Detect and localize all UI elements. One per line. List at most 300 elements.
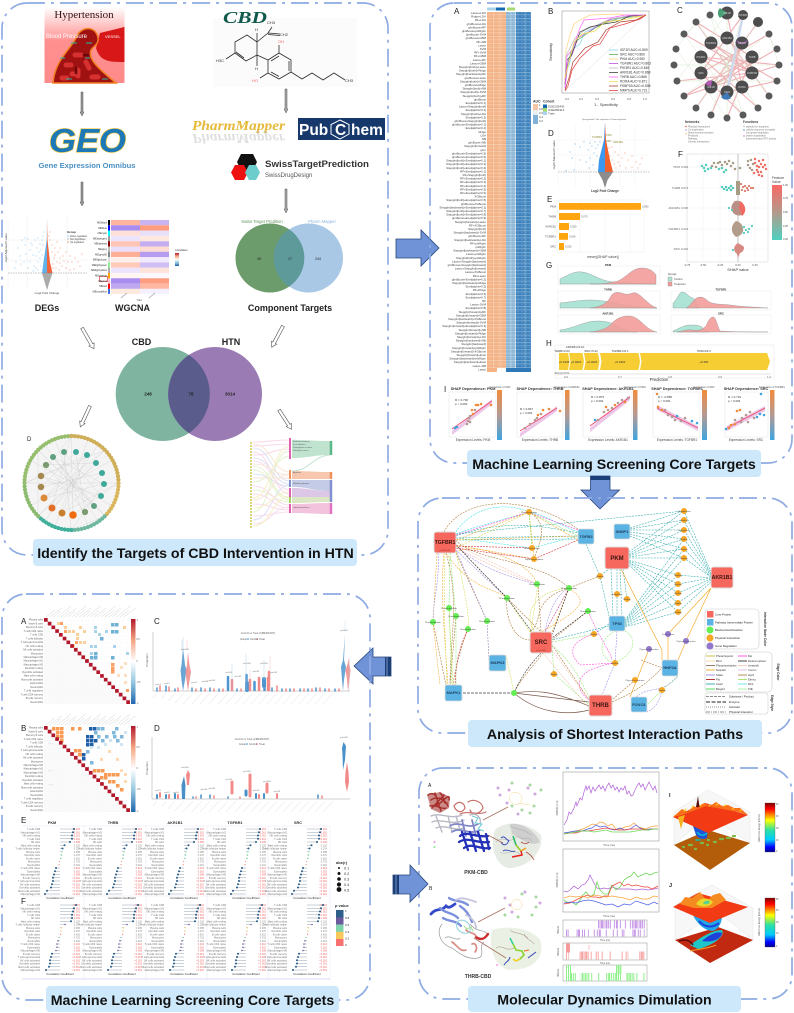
chart A: AUC model heatmap: Stepglm[backward] [461, 342, 486, 346]
chart G: density plots: THRB [604, 288, 612, 292]
chart A: AUC model heatmap: RF+Enet[alpha=0.3] [460, 180, 486, 184]
logo: SwissTargetPrediction: SwissDrugDesign [265, 173, 312, 179]
violin chart C: Control [250, 638, 259, 641]
arrow: GEO to DEGs [80, 182, 84, 206]
logo: GEO [38, 122, 136, 170]
chart A: AUC model heatmap: RF+Ridge [473, 288, 486, 292]
chart C: gene network: RORA [738, 85, 746, 89]
network: reaction nodes: Binding [658, 690, 666, 692]
arrow: component targets to big venn [269, 325, 286, 349]
violin chart C: p<0.01 [226, 671, 233, 674]
legend: edge color: Phosphopoint [716, 654, 733, 658]
chart: WGCNA heatmap: MEgrey60 [95, 252, 108, 256]
network: reaction nodes: Phosphorylation [425, 621, 442, 624]
chart: DEGs volcano: Not Significant [70, 238, 86, 241]
chart B: ROC curves [548, 7, 651, 107]
chart C: gene network: IGF1R [707, 85, 715, 89]
network: reaction nodes: Binding [596, 576, 604, 578]
chart G: density plots: PKM [605, 263, 612, 267]
legend: abs(r): 0.1 [344, 866, 349, 870]
chart C: gene network: MMP9 [738, 41, 746, 45]
chart F: SHAP beeswarm: SHAP value [727, 267, 750, 272]
chart: hydrogen bond barcode purple: HBonds [557, 925, 560, 934]
chart E: mean SHAP bars: E [547, 195, 552, 204]
chart A: AUC model heatmap: Enet[alpha=0.7] [466, 295, 486, 299]
panel: identify targets [2, 3, 388, 566]
heading pill: molecular dynamics: Molecular Dynamics Dimulation [497, 992, 712, 1008]
violin chart D: p=0.2 [164, 792, 170, 794]
network: core proteins [434, 532, 733, 716]
chart A: AUC model heatmap: SVM [480, 47, 487, 51]
chart: DEGs volcano: Log2 Fold Change [35, 291, 60, 295]
network: reaction nodes: Phosphorylation [499, 597, 516, 600]
network: core proteins: THRB [592, 703, 609, 709]
network: reaction nodes: Phosphorylation [524, 547, 541, 550]
legend: edge style: Enzyme [729, 700, 740, 704]
network: reaction nodes: Binding [674, 612, 682, 614]
chart B: ROC curves: 0.6 [611, 97, 615, 101]
panel: molecular dynamics [419, 768, 792, 1012]
chart A: AUC model heatmap: Stepglm[both]+Enet[alpha=0.2] [446, 162, 486, 166]
network: reaction nodes: Binding [674, 603, 682, 605]
chart A: AUC model heatmap: Lasso+RF [473, 58, 486, 62]
chart F: SHAP beeswarm: 0.00 [735, 263, 741, 267]
chart: DEGs volcano: Down-regulated [70, 235, 88, 238]
legend: edge color: Pdb [748, 687, 753, 691]
logo: PubChem [298, 118, 385, 140]
violin chart C: Control vs Treat (CIBERSORT) [241, 632, 275, 635]
heatmap B: B [21, 724, 26, 733]
chart C: gene network: Physical Interactions [688, 126, 711, 128]
lollipop charts E: AKR1B1 [167, 821, 183, 825]
chart F: SHAP beeswarm: THRB [672, 186, 680, 190]
venn: component targets: Pharm Mapper [308, 219, 336, 224]
chart C: gene network: transmembrane RTK activity [746, 138, 777, 140]
chart E: mean SHAP bars: 0.024 [569, 234, 576, 238]
molecule: cannabidiol structure [213, 18, 357, 87]
chart C: gene network: PIK3R1 [697, 55, 706, 59]
chart G: density plots: Group [668, 272, 677, 276]
network: reaction nodes: Binding [623, 599, 631, 601]
network: reaction nodes: Binding [674, 593, 682, 595]
chart A: AUC model heatmap: Enet[alpha=0.2] [466, 108, 486, 112]
chart I: free energy surface: 45 [776, 816, 779, 818]
violin chart C: p=0.4 [191, 682, 197, 684]
chart G: density plots [546, 261, 771, 334]
heading pill: shortest paths [468, 720, 762, 747]
chart E: mean SHAP bars: 0.030 [570, 224, 577, 228]
chart A: AUC model heatmap: Stepglm[both]+SVM [460, 90, 487, 94]
chart A: AUC model heatmap: glmBoost+Stepglm[backward] [448, 263, 486, 267]
chart J: free energy surface: 45 [776, 910, 779, 912]
heatmap B: 0 [136, 768, 138, 770]
arrow: interaction paths to immune [354, 648, 391, 684]
chart A: AUC model heatmap: Lasso+plsRglm [466, 252, 487, 256]
violin chart D: p<0.001 [243, 770, 252, 773]
chart F: SHAP beeswarm: -0.25 [717, 263, 724, 267]
chart A: AUC model heatmap: Lasso [478, 43, 486, 47]
chart I: SHAP dependence scatter plots: p < 0.001 [520, 411, 533, 415]
chart C: gene network: peptidyl-tyr. autophos. [746, 126, 770, 128]
heading pill: shortest paths: Analysis of Shortest Interaction Paths [487, 727, 743, 743]
chart I: SHAP dependence scatter plots: Expression of SRC [489, 386, 511, 389]
network: reaction nodes: Binding [590, 634, 598, 636]
chart F: SHAP beeswarm: SRC [674, 247, 681, 251]
chart C: gene network: IGF1R [723, 11, 731, 15]
heatmap B: -0.5 [136, 789, 141, 791]
chart A: AUC model heatmap: Lasso+LDA [471, 11, 486, 15]
chart I: SHAP dependence scatter plots: I [444, 385, 446, 394]
heatmap B: * ** *** [48, 785, 53, 787]
legend: edge color: Intact [716, 682, 723, 686]
chart H: SHAP waterfall: H [546, 339, 552, 348]
chart I: SHAP dependence scatter plots: p < 0.001 [658, 399, 671, 403]
venn: component targets: 17 [288, 257, 292, 261]
chart I: SHAP dependence scatter plots: Expression of AKR1B1 [554, 386, 580, 389]
chart J: free energy surface: 0 [776, 946, 778, 948]
chart E: mean SHAP bars: THRB [548, 214, 556, 218]
chart A: AUC model heatmap: Stepglm[both]+LDA [461, 112, 486, 116]
chart: RMSD lower: Time (ns) [603, 914, 615, 918]
chart A: AUC model heatmap: RF [482, 299, 486, 303]
chart A: AUC model heatmap: glmBoost+Enet[alpha=0.1] [452, 123, 486, 127]
label: WGCNA: WGCNA [115, 303, 150, 313]
network: reaction nodes: Binding [674, 584, 682, 586]
chart A: AUC model heatmap: RF+Enet[alpha=0.4] [460, 184, 486, 188]
chart A: AUC model heatmap: 0.8 [539, 107, 543, 111]
network: reaction nodes: Phosphorylation [441, 607, 458, 610]
heatmap B: 1 [136, 727, 138, 729]
chart I: SHAP dependence scatter plots: Expression of PKM [624, 386, 646, 389]
chart I: SHAP dependence scatter plots: p < 0.001 [591, 399, 604, 403]
chart A: AUC model heatmap: Stepglm[both] [468, 227, 486, 231]
chart A: AUC model heatmap: Stepglm[both]+Lasso [459, 65, 486, 69]
chart A: AUC model heatmap: Stepglm[backward]+XGBoost [448, 317, 486, 321]
chart A: AUC model heatmap: Stepglm[both]+Ridge [459, 69, 486, 73]
network: reaction nodes: Acetylation [612, 593, 623, 596]
chart A: AUC model heatmap: Lasso+NB [473, 364, 486, 368]
chart F: SHAP beeswarm: 0.036 [681, 206, 688, 210]
chart G: density plots: Treatment [674, 282, 686, 286]
label: DEGs: DEGs [35, 303, 59, 313]
chart B: ROC curves: SRC AUC=0.860 [620, 53, 645, 57]
chart A: AUC model heatmap: Stepglm[forward]+Enet[alpha=0.3] [442, 324, 486, 328]
chart A: AUC model heatmap: Stepglm[forward]+GBM [456, 313, 487, 317]
chart H: SHAP waterfall: AKR1B1=5.10 [566, 345, 585, 349]
logo: GEO: Gene Expression Omnibus [38, 161, 136, 170]
venn: component targets [236, 219, 343, 292]
arrow: venn to sankey [276, 408, 294, 431]
chart G: density plots: TGFBR1 [715, 288, 727, 292]
chart A: AUC model heatmap: Stepglm[both]+plsRglm [456, 256, 487, 260]
chart A: AUC model heatmap: Stepglm[forward]+XGBoost [451, 349, 486, 353]
arrow: venn to PPI network [78, 405, 93, 428]
chart E: mean SHAP bars: PKM [550, 204, 557, 208]
chart A: AUC model heatmap: Stepglm[forward]+Ridge [455, 331, 486, 335]
venn: CBD and HTN overlap: HTN [222, 337, 240, 347]
figure A: PKM-CBD complex: PKM-CBD [464, 870, 488, 876]
chart D: volcano [548, 118, 650, 193]
chart B: ROC curves: 0.2 [579, 97, 583, 101]
violin chart D [145, 724, 350, 812]
chart F: SHAP beeswarm: 0.25 [752, 263, 758, 267]
chart: WGCNA heatmap: MEcyan [98, 231, 108, 235]
chart F: SHAP beeswarm: 0.073 [681, 186, 688, 190]
heatmap A: -0.5 [136, 682, 141, 684]
chart A: AUC model heatmap: Stepglm[backward]+LDA [454, 238, 486, 242]
chart A: AUC model heatmap: Stepglm[backward]+NB [456, 339, 486, 343]
network: core proteins: p.K17/p.T3 [440, 550, 451, 552]
chart A: AUC model heatmap: glmBoost+Enet[alpha=0.2] [452, 277, 486, 281]
chart I: free energy surface: 30 [776, 828, 779, 830]
chart F: SHAP beeswarm: -0.50 [700, 263, 707, 267]
chart D: volcano: -log10 Adjusted P-value [552, 140, 556, 170]
chart G: density plots: Control [674, 277, 683, 281]
venn: CBD and HTN overlap: 3014 [225, 392, 236, 396]
chart B: ROC curves: MMP9 AUC=0.721 [620, 89, 648, 93]
legend: interaction node color: Pathway Intermediate Protein [715, 620, 753, 624]
network: reaction nodes: Phosphorylation [521, 511, 538, 514]
chart H: SHAP waterfall: +0.0224 [587, 360, 598, 364]
chart H: SHAP waterfall: +0.0224 [571, 360, 582, 364]
network: reaction nodes: Binding [680, 520, 688, 522]
chart C: gene network: SRC [698, 71, 704, 75]
chart: RMSD lower [555, 849, 659, 918]
chart E: mean SHAP bars: 0.073 [581, 214, 588, 218]
chart B: ROC curves: PKM AUC=0.952 [620, 57, 645, 61]
network: reaction nodes: Transcription [662, 633, 675, 636]
chart A: AUC model heatmap: RF+Enet[alpha=0.5] [460, 187, 486, 191]
network: reaction nodes: Phosphorylation [479, 620, 496, 623]
lollipop charts E: PKM [48, 821, 56, 825]
chart: WGCNA heatmap: MElightyellow [91, 268, 107, 272]
venn: CBD and HTN overlap: CBD [132, 337, 152, 347]
legend: interaction node color: Physical Interaction [715, 636, 740, 640]
network: reaction nodes [425, 510, 696, 693]
chart B: ROC curves: AKR1B1 AUC=0.868 [620, 71, 651, 75]
chart A: AUC model heatmap: AUC [533, 100, 541, 104]
logo: PubChem: C [335, 122, 346, 139]
chart C: gene network: protein localization [746, 134, 766, 138]
legend: abs(r): 0.4 [344, 883, 349, 887]
chart I: SHAP dependence scatter plots: R = 0.790 [455, 398, 468, 402]
chart: hydrogen bond barcode green [557, 965, 647, 981]
network: pathway intermediate proteins: HNF4A [663, 665, 677, 670]
network: reaction nodes: Physical interaction [626, 679, 645, 682]
chart E: mean SHAP bars [545, 195, 649, 259]
chart A: AUC model heatmap: glmBoost+RF [468, 234, 486, 238]
violin chart C [145, 617, 350, 704]
chart: sankey: Focal adhesion [293, 444, 305, 446]
network: reaction nodes: Binding [680, 539, 688, 541]
network: pathway intermediate proteins [445, 524, 678, 712]
chart C: gene network: cell growth regulation [746, 132, 769, 134]
chart A: AUC model heatmap: Enet[alpha=0.4] [466, 126, 486, 130]
legend: interaction node color: Core Protein [715, 612, 732, 616]
chart B: ROC curves: FKBP1B AUC=0.808 [620, 84, 651, 88]
violin chart C: Proportion [145, 653, 149, 666]
chart C: gene network: THRB [748, 55, 756, 59]
chart F: SHAP beeswarm: 0.020 [681, 247, 688, 251]
chart: WGCNA heatmap: Trait [136, 298, 142, 302]
legend: edge style [705, 693, 774, 714]
venn: component targets: Swiss Target Predition [241, 219, 283, 224]
chart F: SHAP beeswarm: F [678, 150, 683, 159]
violin chart D: p=0.02 [253, 790, 260, 792]
chart A: AUC model heatmap: plsRglm [476, 245, 487, 249]
network: reaction nodes: Physical interaction [640, 648, 659, 651]
chart: PPI network D: D [27, 437, 32, 443]
chart: WGCNA heatmap [91, 220, 188, 302]
chart C: gene network: Genetic Interactions [688, 140, 710, 144]
chart: WGCNA heatmap: MEdarkred [94, 242, 108, 246]
chart I: SHAP dependence scatter plots: R = 0.847 [520, 407, 533, 411]
network: reaction nodes: Binding [674, 575, 682, 577]
figure A: PKM-CBD complex: A [428, 783, 432, 789]
legend: edge color: Spike [716, 673, 723, 677]
heading pill: machine learning screening 2: Machine Learning Screening Core Targets [51, 993, 334, 1009]
chart A: AUC model heatmap: Stepglm[forward]+RF [459, 310, 486, 314]
legend: p value: p value [335, 903, 350, 908]
figure B: THRB-CBD complex [429, 886, 542, 980]
chart A: AUC model heatmap: Stepglm[both]+GBM [460, 79, 487, 83]
chart A: AUC model heatmap: A [454, 7, 460, 16]
chart I: SHAP dependence scatter plots: SHAP Dependence: PKM [451, 387, 495, 391]
chart H: SHAP waterfall: +0.281 [700, 360, 709, 364]
network: pathway intermediate proteins: TP53 [612, 621, 623, 626]
molecule: cannabidiol structure: H3C [216, 58, 224, 63]
chart A: AUC model heatmap: RF+Lasso [473, 274, 486, 278]
heatmap B: ** * ** * [48, 771, 54, 773]
chart I: SHAP dependence scatter plots: Expression Levels: TGFBR1 [657, 438, 697, 442]
chart H: SHAP waterfall: 1.0 [767, 375, 771, 379]
network: reaction nodes: Binding [680, 558, 688, 560]
chart A: AUC model heatmap: Stepglm[both]+RF [463, 94, 486, 98]
violin chart C: p<0.001 [181, 648, 190, 651]
lig-plot B top [505, 892, 540, 917]
chart C: gene network: C [677, 6, 683, 15]
chart A: AUC model heatmap: Lasso+Stepglm[both] [459, 105, 486, 109]
chart I: SHAP dependence scatter plots: p < 0.001 [728, 399, 741, 403]
arrow: databases to venn [284, 189, 288, 213]
chart A: AUC model heatmap: Stepglm[backward]+Enet[alpha=0.2] [439, 205, 486, 209]
network: pathway intermediate proteins: FOXO1 [632, 702, 647, 707]
legend: edge color: Dip [748, 654, 753, 658]
chart I: SHAP dependence scatter plots: Expression of SRC [693, 386, 715, 389]
network: reaction nodes: Dephosphorylation [525, 558, 544, 561]
chart: hydrogen bond barcode red: HBonds [557, 947, 560, 956]
legend: abs(r): 0.2 [344, 872, 349, 876]
legend: edge style: Edge Style [770, 695, 774, 711]
chart A: AUC model heatmap: glmBoost+Ridge [465, 83, 486, 87]
violin chart C: p=0.02 [235, 676, 242, 678]
violin chart D: Control vs Treat (CIBERSORT) [235, 738, 269, 741]
chart A: AUC model heatmap: glmBoost+NB [468, 141, 486, 145]
chart B: ROC curves: THRB AUC=0.866 [620, 75, 647, 79]
chart I: SHAP dependence scatter plots: Expression Levels: AKR1B1 [588, 438, 628, 442]
chart B: ROC curves: Sensitivity [548, 43, 553, 61]
legend: edge color: Edge Color [776, 663, 780, 681]
violin chart C: Group [240, 638, 248, 641]
legend: edge color: Mutual upload [748, 659, 766, 663]
violin chart D: p<0.01 [226, 778, 233, 781]
legend: abs(r) [336, 860, 349, 892]
chart A: AUC model heatmap: LDA [480, 133, 486, 137]
chart A: AUC model heatmap: 0.6 [539, 111, 543, 115]
network: core proteins: SRC [535, 640, 548, 646]
legend: interaction node color: Interaction Node Color [763, 612, 767, 647]
chart A: AUC model heatmap: Lasso [478, 367, 486, 371]
chart A: AUC model heatmap: Stepglm[forward]+LDA [457, 335, 486, 339]
chart A: AUC model heatmap: Stepglm[both]+Enet[alpha=0.1] [446, 159, 486, 163]
chart C: gene network [674, 6, 779, 144]
chart C: gene network: PIK3R1 [739, 13, 748, 17]
chart D: volcano: TGFBR1 [592, 135, 603, 139]
chart C: gene network: FKBP1B [747, 71, 757, 75]
legend: interaction node color: Biochemical Reaction [715, 628, 743, 632]
lig-plot B binding pocket [491, 928, 542, 970]
lollipop charts E: TGFBR1 [227, 821, 243, 825]
legend: edge color [705, 652, 780, 692]
logo: SwissTargetPrediction [231, 154, 369, 180]
chart B: ROC curves: 0.0 [565, 97, 569, 101]
chart H: SHAP waterfall: Prediction [650, 377, 669, 382]
chart A: AUC model heatmap: Ridge+LDA [471, 15, 486, 19]
network: reaction nodes: Ubiquitination [677, 510, 691, 513]
heatmap A: A [21, 617, 27, 626]
chart A: AUC model heatmap: RF+Enet[alpha=0.2] [460, 177, 486, 181]
legend: edge color: Biogrid [716, 687, 725, 691]
chart E: mean SHAP bars: mean(|SHAP value|) [587, 255, 619, 259]
chart A: AUC model heatmap: Stepglm[forward] [464, 144, 486, 148]
lollipop charts E: E [21, 816, 26, 825]
chart A: AUC model heatmap: Stepglm[forward]+Lasso [455, 220, 486, 224]
network: reaction nodes: Phosphorylation [580, 610, 597, 613]
chart A: AUC model heatmap: glmBoost+RF [468, 25, 486, 29]
arrow: hypertension to GEO [80, 92, 84, 116]
chart A: AUC model heatmap: glmBoost+plsRglm [462, 29, 487, 33]
heatmap A: 0 [136, 661, 138, 663]
chart C: gene network: AKR1B1 [722, 36, 733, 40]
heatmap A: 1 [136, 620, 138, 622]
chart I: SHAP dependence scatter plots [444, 385, 785, 442]
chart I: free energy surface: 0 [776, 851, 778, 853]
legend: abs(r): abs(r) [336, 860, 348, 865]
panel: shortest interaction paths [418, 498, 792, 747]
chart A: AUC model heatmap: GSE239442 [548, 104, 565, 108]
chart: sankey: Proteoglycans in cancer [293, 446, 313, 449]
lollipop charts F: F [21, 897, 26, 906]
chart H: SHAP waterfall: 0.9 [718, 375, 722, 379]
network: core proteins: p.Tyr-530 [536, 649, 546, 652]
chart A: AUC model heatmap: RF+SVM [474, 51, 487, 55]
chart: hydrogen bond barcode green: HBonds [557, 968, 560, 977]
chart: RMSD upper: RMSD (nm) [555, 801, 559, 815]
network: reaction nodes: Binding [550, 674, 558, 676]
molecule: cannabidiol structure: CH3 [267, 20, 276, 25]
legend: abs(r): 0.5 [344, 888, 349, 892]
chart I: SHAP dependence scatter plots: Expression Levels: THRB [522, 438, 558, 442]
violin chart D: p<0.001 [181, 766, 190, 769]
chart A: AUC model heatmap: Enet[alpha=0.8] [466, 306, 486, 310]
chart: sankey [251, 438, 331, 528]
chart A: AUC model heatmap: Enet[alpha=0.3] [466, 115, 486, 119]
chart J: free energy surface: 15 [776, 933, 779, 935]
chart F: SHAP beeswarm [668, 150, 788, 272]
chart: DEGs volcano [4, 217, 88, 295]
chart A: AUC model heatmap: Cohort [543, 100, 555, 104]
venn: component targets: 244 [315, 257, 321, 261]
